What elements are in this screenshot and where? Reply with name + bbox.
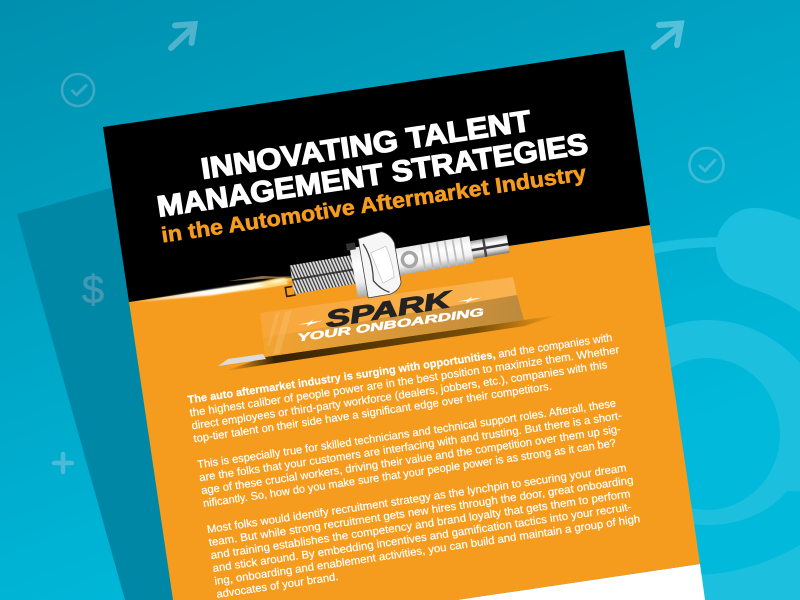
title: INNOVATING TALENT bbox=[199, 105, 533, 186]
background shape: back sheet bbox=[17, 184, 250, 600]
paragraph 3 line 6: advocates of your brand. bbox=[216, 571, 339, 600]
banner light stripes bbox=[267, 310, 292, 355]
panel: black header bbox=[103, 50, 650, 302]
paragraph 2 line 3: age of these crucial workers, driving their value and the competition over them up sig- bbox=[200, 423, 622, 497]
spark plug bbox=[279, 211, 513, 311]
document text bbox=[150, 97, 647, 600]
icon: check circle right bbox=[690, 148, 724, 182]
paragraph 3: Most folks would identify recruitment strategy as the lynchpin to securing your dream bbox=[206, 462, 627, 536]
banner lower face bbox=[263, 295, 524, 357]
icon: check circle left bbox=[62, 74, 94, 106]
plug electrode hook bbox=[285, 286, 296, 296]
plug thread bbox=[290, 254, 362, 294]
title: MANAGEMENT STRATEGIES bbox=[155, 128, 590, 224]
icon: plus bbox=[54, 454, 72, 472]
banner sliver bbox=[218, 354, 266, 366]
banner upper face bbox=[260, 277, 517, 338]
icon: dollar sign: $ bbox=[82, 268, 104, 312]
paragraph 3 line 2: team. But while strong recruitment gets new hires through the door, great onboarding bbox=[208, 474, 634, 549]
icon: arrow top left bbox=[171, 24, 194, 48]
icon: arrow top right bbox=[654, 24, 681, 47]
banner spark marks bbox=[298, 296, 482, 326]
paragraph 2 line 4: nificantly. So, how do you make sure that your people power is as strong as it can be? bbox=[202, 437, 617, 510]
paragraph 1 line 4: top-tier talent on their side have a significant edge over their competitors. bbox=[193, 381, 553, 445]
paragraph 2 line 2: are the folks that your customers are interfacing with and trusting. But there is a short- bbox=[198, 410, 623, 484]
panel: orange body bbox=[129, 225, 700, 600]
paragraph 1 line 2: the highest caliber of people power are in the best position to maximize them. Whether bbox=[189, 344, 620, 419]
banner heading: SPARK bbox=[324, 286, 454, 332]
paragraph 1: The auto aftermarket industry is surging with opportunities, and the companies with bbox=[187, 332, 613, 406]
plug insulator bbox=[394, 236, 474, 275]
paragraph 3 line 3: and training establishes the competency and brand loyalty that gets them to perform bbox=[210, 488, 631, 562]
plug terminal bbox=[470, 235, 510, 259]
spark streak bbox=[135, 278, 288, 302]
paragraph 2: This is especially true for skilled technicians and technical support roles. Afterall, these bbox=[197, 398, 617, 471]
body text bbox=[187, 331, 647, 600]
paragraph 3 line 4: and stick around. By embedding incentives and gamification tactics into your recruit- bbox=[212, 501, 632, 575]
banner subheading: YOUR ONBOARDING bbox=[297, 306, 485, 344]
plug hex nut bbox=[345, 230, 403, 300]
banner: spark your onboarding bbox=[260, 277, 524, 357]
spark flare bbox=[228, 273, 298, 292]
title bbox=[150, 97, 590, 224]
paragraph 1 line 3: direct employees or third-party workforce (dealers, jobbers, etc.), companies with this bbox=[191, 359, 609, 432]
panel: white footer bbox=[457, 564, 705, 600]
paragraph 3 line 5: ing, onboarding and enablement activities, you can build and maintain a group of high bbox=[214, 513, 641, 588]
banner shadow bbox=[225, 315, 558, 371]
subtitle: in the Automotive Aftermarket Industry bbox=[160, 161, 588, 247]
background shape: large spark plug outline bbox=[634, 208, 800, 600]
